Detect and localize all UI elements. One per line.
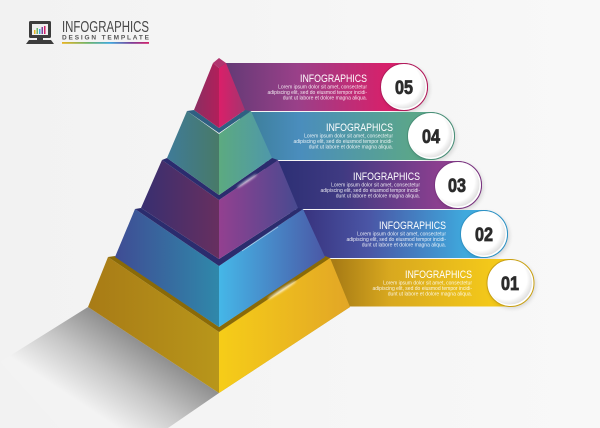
- body text 04: [294, 134, 393, 150]
- circle 01: [487, 260, 536, 308]
- body text 04: adipiscing elit, sed do eiusmod tempor incidi-: [294, 139, 393, 145]
- body text 01: dunt ut labore et dolore magna aliqua.: [388, 292, 472, 298]
- number 05: 05: [395, 77, 413, 99]
- body text 01: adipiscing elit, sed do eiusmod tempor incidi-: [372, 286, 472, 292]
- body text 03: dunt ut labore et dolore magna aliqua.: [336, 194, 420, 200]
- ribbon 02: [290, 210, 508, 258]
- body text 03: [320, 182, 420, 200]
- body text 03: Lorem ipsum dolor sit amet, consectetur: [331, 182, 420, 188]
- tier 02: blue: [115, 208, 325, 327]
- banner 01: [320, 259, 536, 308]
- circle 04: [408, 112, 456, 162]
- body text 05: [268, 84, 367, 102]
- circle 05: [380, 64, 430, 112]
- banner 02: [290, 210, 510, 260]
- tier 05: magenta top: [194, 58, 245, 128]
- circle 02: [460, 210, 510, 260]
- tier 01: yellow: [88, 256, 350, 393]
- heading 02: INFOGRAPHICS: [379, 220, 446, 232]
- highlight glints: [236, 173, 297, 300]
- number 04: 04: [422, 126, 440, 148]
- header logo: [26, 19, 150, 44]
- heading 01: INFOGRAPHICS: [405, 269, 472, 281]
- body text 04: Lorem ipsum dolor sit amet, consectetur: [304, 134, 393, 140]
- body text 05: dunt ut labore et dolore magna aliqua.: [283, 96, 367, 102]
- heading 03: INFOGRAPHICS: [353, 171, 420, 183]
- ribbon 05: [219, 63, 428, 111]
- heading 04: INFOGRAPHICS: [326, 122, 393, 134]
- icon: computer monitor with chart: [26, 21, 54, 44]
- body text 02: Lorem ipsum dolor sit amet, consectetur: [357, 232, 446, 238]
- heading 05: INFOGRAPHICS: [300, 73, 367, 85]
- ribbon 01: [320, 259, 532, 306]
- tier 04: green: [167, 110, 272, 195]
- ribbon 03: [265, 161, 482, 209]
- number 02: 02: [475, 224, 493, 246]
- body text 02: adipiscing elit, sed do eiusmod tempor incidi-: [346, 237, 446, 243]
- logo title: INFOGRAPHICS: [62, 19, 149, 36]
- logo subtitle: DESIGN TEMPLATE: [62, 34, 150, 42]
- body text 04: dunt ut labore et dolore magna aliqua.: [309, 144, 393, 150]
- body text 02: [346, 232, 446, 248]
- banner 03: [265, 161, 484, 210]
- circle 03: [434, 162, 484, 210]
- body text 05: Lorem ipsum dolor sit amet, consectetur: [278, 84, 367, 90]
- body text 01: Lorem ipsum dolor sit amet, consectetur: [383, 280, 472, 286]
- pyramid cast shadow: [0, 307, 219, 428]
- body text 02: dunt ut labore et dolore magna aliqua.: [362, 242, 446, 248]
- tier 03: purple: [141, 158, 298, 259]
- rainbow underline: [62, 42, 149, 44]
- 3D pyramid: [88, 58, 350, 393]
- body text 01: [372, 280, 472, 298]
- banner 05: [219, 63, 430, 112]
- number 01: 01: [501, 273, 519, 295]
- number 03: 03: [448, 175, 466, 197]
- body text 05: adipiscing elit, sed do eiusmod tempor incidi-: [268, 90, 367, 96]
- ribbon 04: [240, 112, 455, 160]
- body text 03: adipiscing elit, sed do eiusmod tempor incidi-: [320, 188, 420, 194]
- banner 04: [240, 112, 456, 162]
